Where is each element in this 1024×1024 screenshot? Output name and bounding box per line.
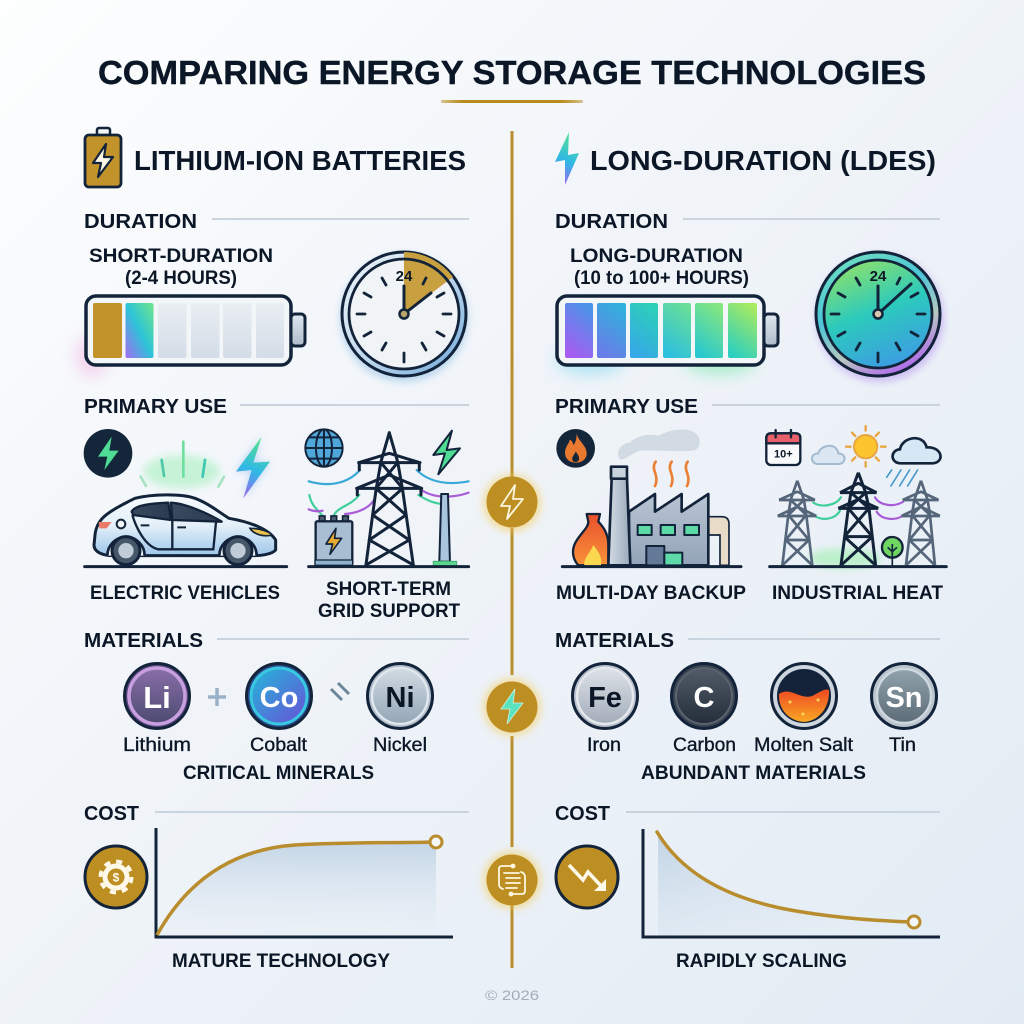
label: short-duration: SHORT-DURATION — [89, 245, 273, 267]
material: molten salt: Molten Salt — [754, 735, 854, 756]
panel: long-duration storage — [555, 132, 946, 972]
panel: lithium-ion batteries — [76, 128, 469, 972]
material: iron: Iron — [587, 735, 621, 756]
label: critical minerals: CRITICAL MINERALS — [183, 762, 374, 784]
battery gauge: full — [556, 296, 778, 374]
icon: gradient bolt — [236, 437, 270, 498]
transformer box — [315, 516, 353, 565]
icon: sun — [846, 426, 886, 467]
material: molten salt — [754, 664, 854, 756]
label: short-duration: (2-4 HOURS) — [125, 268, 237, 289]
chart: rapidly scaling cost curve — [643, 829, 940, 937]
label: mature technology: MATURE TECHNOLOGY — [172, 950, 390, 972]
tower: left — [778, 481, 816, 565]
section heading: materials: MATERIALS — [84, 630, 203, 652]
section heading: primary use: PRIMARY USE — [84, 396, 227, 418]
pipes — [708, 517, 729, 565]
section heading: primary use: PRIMARY USE — [555, 396, 698, 418]
title: COMPARING ENERGY STORAGE TECHNOLOGIES — [98, 54, 926, 91]
charging glow rays — [141, 442, 224, 488]
icon: cost gear: $ — [113, 870, 120, 884]
power lines — [813, 497, 903, 519]
label: abundant materials: ABUNDANT MATERIALS — [641, 762, 866, 784]
material: iron — [572, 664, 638, 756]
power lines — [309, 470, 469, 517]
icon: dark circle flame — [556, 429, 595, 468]
material: tin: Tin — [889, 735, 916, 756]
icon: electric vehicle scene — [84, 429, 287, 567]
tower: right — [902, 481, 940, 565]
transmission tower — [357, 433, 422, 565]
material: carbon: C — [694, 682, 715, 714]
icon: tree — [882, 537, 903, 566]
slanted separator — [331, 683, 349, 700]
copyright: © 2026 — [485, 987, 539, 1003]
material: nickel: Nickel — [373, 735, 427, 756]
icon: grid and weather scene — [766, 426, 946, 568]
label: short-duration — [89, 245, 273, 289]
icon: cost gear — [85, 846, 147, 908]
clock: full gradient: 24 — [870, 268, 887, 285]
icon: gold battery — [85, 128, 121, 187]
material: iron: Fe — [588, 682, 622, 714]
icon: green bolt — [433, 431, 460, 474]
icon: calendar 10+: 10+ — [774, 448, 793, 460]
section heading: cost: COST — [84, 803, 139, 825]
flame — [573, 514, 608, 565]
plus sign — [208, 688, 226, 706]
icon: factory scene — [556, 429, 741, 567]
icon: rain cloud — [887, 438, 941, 486]
label: rapidly scaling: RAPIDLY SCALING — [676, 950, 847, 972]
divider icon: teal bolt — [483, 678, 541, 736]
utility pole — [433, 494, 457, 566]
heading: lithium-ion batteries: LITHIUM-ION BATTERIES — [134, 145, 466, 176]
divider icon: outlined bolt — [483, 474, 541, 532]
car — [85, 495, 287, 567]
material: carbon: Carbon — [673, 735, 736, 756]
title underline — [441, 100, 583, 103]
material: nickel: Ni — [386, 682, 414, 714]
icon: dark circle bolt — [84, 429, 132, 478]
material: cobalt: Cobalt — [250, 735, 308, 756]
center divider with icons — [483, 131, 541, 968]
material: cobalt — [246, 664, 312, 756]
chart: mature technology cost curve — [156, 828, 453, 937]
tower: middle — [838, 473, 878, 565]
section heading: duration: DURATION — [84, 211, 197, 233]
label: long-duration: (10 to 100+ HOURS) — [574, 268, 749, 289]
label: short-term grid support — [318, 578, 460, 622]
icon: falling cost arrow — [556, 846, 618, 908]
material: tin — [872, 664, 936, 756]
battery gauge: two of six segments — [76, 296, 305, 376]
section heading: materials: MATERIALS — [555, 630, 674, 652]
clock: gold wedge: 24 — [396, 268, 413, 285]
icon: globe — [305, 429, 343, 467]
clock: gold wedge — [340, 252, 468, 382]
smoke — [618, 430, 700, 459]
label: multi-day backup: MULTI-DAY BACKUP — [556, 582, 746, 604]
section heading: duration: DURATION — [555, 211, 668, 233]
label: short-term grid support: SHORT-TERM — [326, 578, 451, 600]
label: short-term grid support: GRID SUPPORT — [318, 600, 460, 622]
material: lithium: Li — [143, 680, 171, 715]
clock: full gradient — [816, 252, 944, 382]
material: cobalt: Co — [260, 682, 298, 714]
icon: calendar 10+ — [766, 430, 800, 465]
label: electric vehicles: ELECTRIC VEHICLES — [90, 582, 280, 604]
material: nickel — [368, 664, 432, 756]
icon: gradient bolt header — [555, 132, 579, 185]
label: long-duration — [570, 245, 749, 289]
material: carbon — [672, 664, 736, 756]
section heading: cost: COST — [555, 803, 610, 825]
material: lithium: Lithium — [123, 735, 191, 756]
divider icon: cycle arrows — [483, 851, 541, 909]
icon: grid support scene — [305, 429, 469, 567]
ground glow — [808, 548, 882, 568]
chimney — [608, 467, 630, 565]
icon: small cloud — [812, 446, 845, 464]
label: long-duration: LONG-DURATION — [570, 245, 743, 267]
label: industrial heat: INDUSTRIAL HEAT — [772, 582, 943, 604]
material: tin: Sn — [885, 682, 923, 714]
heat squiggles — [654, 462, 688, 486]
material: lithium — [123, 664, 191, 756]
factory building — [629, 494, 708, 565]
heading: long-duration (ldes): LONG-DURATION (LDES) — [590, 145, 936, 176]
